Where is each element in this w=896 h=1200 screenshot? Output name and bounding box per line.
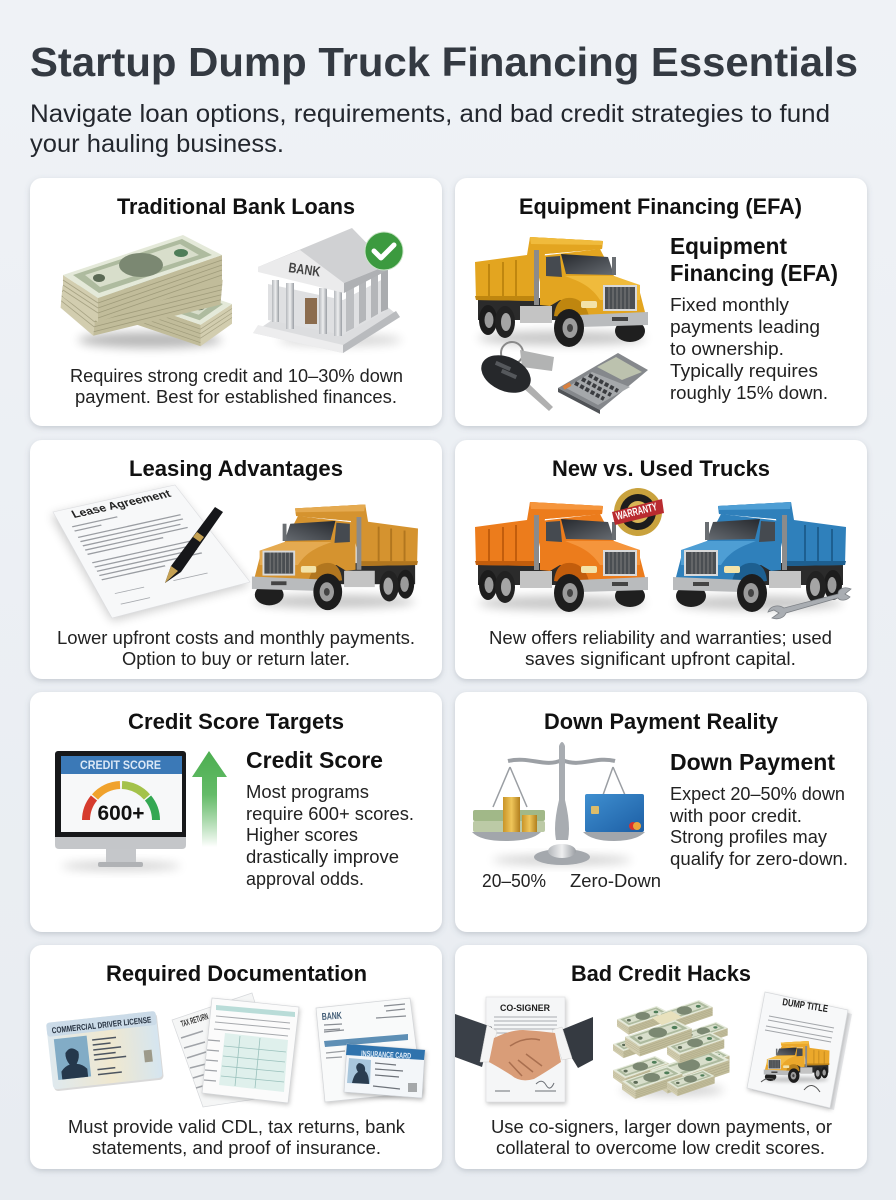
icon: monitor with gauge: 600+ xyxy=(98,802,144,825)
card background xyxy=(30,945,442,1169)
heading: Required Documentation xyxy=(106,961,367,986)
panel: required documentation xyxy=(30,945,442,1169)
panel: leasing advantages xyxy=(30,440,442,679)
body text: Most programs xyxy=(246,782,369,802)
side heading: Equipment xyxy=(670,233,787,259)
icon: bank building with check xyxy=(253,228,403,353)
body text: Typically requires xyxy=(670,361,818,381)
heading: Leasing Advantages xyxy=(129,456,343,481)
icon: balance scale xyxy=(472,742,645,865)
icon: monitor with gauge xyxy=(55,751,186,870)
icon: blue used truck xyxy=(673,502,846,612)
side heading: Down Payment xyxy=(670,749,835,775)
icon: lease agreement document: Lease Agreement xyxy=(69,488,173,521)
body text: drastically improve xyxy=(246,847,399,867)
icon: dump title document: DUMP TITLE xyxy=(782,997,829,1015)
icon: tax return papers: TAX RETURN xyxy=(180,1011,209,1029)
panel: equipment financing xyxy=(455,178,867,426)
body text: Fixed monthly xyxy=(670,295,789,315)
side heading: Financing (EFA) xyxy=(670,260,838,286)
title: Startup Dump Truck Financing Essentials xyxy=(30,39,858,85)
icon: co-signer document: CO-SIGNER xyxy=(500,1003,550,1014)
icon: warranty badge xyxy=(612,488,664,536)
icon: green up arrow xyxy=(192,751,227,847)
icon: co-signer document xyxy=(486,997,565,1102)
panel: traditional bank loans xyxy=(30,178,442,426)
icon: yellow dump truck xyxy=(475,237,648,347)
panel: down payment reality xyxy=(455,692,867,932)
icon: pen xyxy=(165,507,223,583)
icon: tax return papers xyxy=(172,993,299,1107)
body text: Lower upfront costs and monthly payments. xyxy=(57,628,415,648)
icon: keys xyxy=(475,342,554,411)
icon: handshake xyxy=(455,1014,593,1080)
panel: new vs used trucks xyxy=(455,440,867,679)
body text: approval odds. xyxy=(246,869,364,889)
body text: require 600+ scores. xyxy=(246,804,414,824)
icon: warranty badge: WARRANTY xyxy=(615,501,659,523)
heading: Equipment Financing (EFA) xyxy=(519,194,802,219)
body text: Expect 20–50% down xyxy=(670,784,845,804)
body text: collateral to overcome low credit scores. xyxy=(496,1138,825,1158)
icon: bank statement and insurance card: BANK xyxy=(321,1011,343,1023)
icon: bank building with check: BANK xyxy=(288,259,321,279)
card background xyxy=(30,692,442,932)
label: 20–50%: 20–50% xyxy=(482,871,546,891)
body text: Must provide valid CDL, tax returns, bank xyxy=(68,1117,406,1137)
body text: statements, and proof of insurance. xyxy=(92,1138,381,1158)
body text: payments leading xyxy=(670,317,820,337)
icon: money stacks xyxy=(58,235,232,348)
body text: Option to buy or return later. xyxy=(122,649,350,669)
icon: tan dump truck xyxy=(252,505,418,610)
body text xyxy=(246,782,414,889)
icon: commercial driver license xyxy=(46,1011,164,1092)
panel: bad credit hacks xyxy=(455,945,867,1169)
heading: New vs. Used Trucks xyxy=(552,456,770,481)
body text xyxy=(669,784,848,869)
body text: Requires strong credit and 10–30% down xyxy=(70,366,403,386)
side heading: Credit Score xyxy=(246,747,383,773)
label: Zero-Down: Zero-Down xyxy=(570,871,661,891)
body text xyxy=(489,628,832,669)
card background xyxy=(455,692,867,932)
heading: Down Payment Reality xyxy=(544,709,778,734)
body text: New offers reliability and warranties; used xyxy=(489,628,832,648)
icon: monitor with gauge: CREDIT SCORE xyxy=(80,760,161,772)
card background xyxy=(455,945,867,1169)
card background xyxy=(455,440,867,679)
icon: orange new truck xyxy=(475,502,648,612)
icon: lease agreement document xyxy=(51,485,250,621)
body text: to ownership. xyxy=(670,339,784,359)
heading: Traditional Bank Loans xyxy=(117,194,355,219)
body text: with poor credit. xyxy=(669,806,802,826)
icon: calculator xyxy=(558,353,648,414)
panel: credit score targets xyxy=(30,692,442,932)
subtitle xyxy=(30,100,830,158)
body text: roughly 15% down. xyxy=(670,383,828,403)
card background xyxy=(455,178,867,426)
body text xyxy=(70,366,403,407)
subtitle: Navigate loan options, requirements, and bad credit strategies to fund xyxy=(30,100,830,128)
icon: bank statement and insurance card xyxy=(316,998,425,1102)
body text: Strong profiles may xyxy=(670,827,827,847)
side heading xyxy=(670,233,838,286)
heading: Bad Credit Hacks xyxy=(571,961,751,986)
body text: saves significant upfront capital. xyxy=(525,649,796,669)
icon: dump title document xyxy=(747,992,852,1110)
body text xyxy=(57,628,415,669)
body text: Use co-signers, larger down payments, or xyxy=(491,1117,832,1137)
body text xyxy=(68,1117,406,1158)
heading: Credit Score Targets xyxy=(128,709,344,734)
body text: qualify for zero-down. xyxy=(670,849,848,869)
card background xyxy=(30,178,442,426)
icon: bank statement and insurance card: INSURANCE CARD xyxy=(361,1049,411,1061)
icon: wrench xyxy=(768,588,851,619)
body text xyxy=(670,295,828,403)
icon: commercial driver license: COMMERCIAL DRIVER LICENSE xyxy=(51,1014,152,1035)
body text: payment. Best for established finances. xyxy=(75,387,397,407)
body text xyxy=(491,1117,832,1158)
icon: pile of cash xyxy=(613,1000,730,1099)
subtitle: your hauling business. xyxy=(30,130,284,158)
card background xyxy=(30,440,442,679)
body text: Higher scores xyxy=(246,825,358,845)
